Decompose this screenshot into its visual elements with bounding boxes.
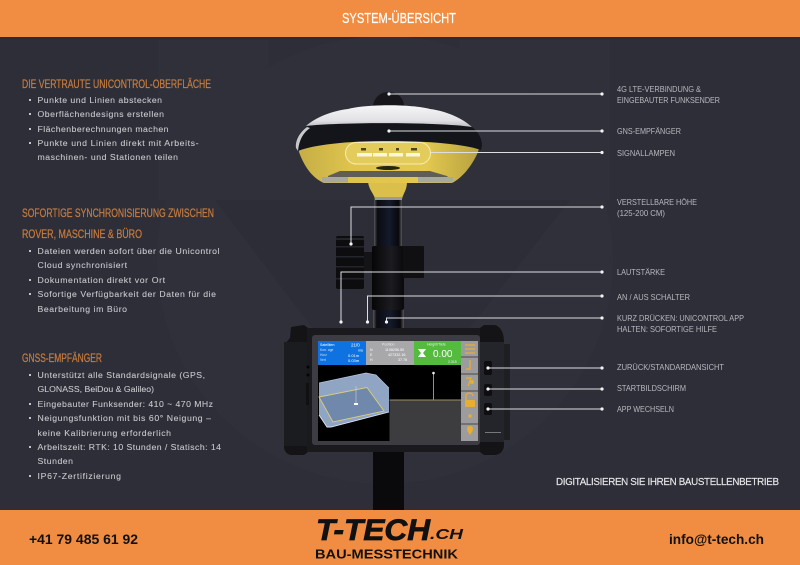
callout labels: ZURÜCK/STANDARDANSICHT [617,362,724,372]
screen panel: blue status: Korr. age [320,348,334,352]
callout labels: 4G LTE-VERBINDUNG & [617,84,701,94]
bullet list: GNSS receiver: IP67-Zertifizierung [38,471,121,481]
screen panel: blue status: 0.01m [348,353,360,358]
screen panel: blue status: Horz [320,353,327,357]
bullet list: interface [29,95,199,162]
tagline: DIGITALISIEREN SIE IHREN BAUSTELLENBETRIEB [556,477,779,488]
screen panel: height: Height/Tiefe [427,342,446,346]
logo: T-TECH.ch: BAU-MESSTECHNIK [315,548,458,562]
bullet list: GNSS receiver: GLONASS, BeiDou & Galileo) [38,384,154,394]
bumper [504,344,510,440]
heading: synchronisation: SOFORTIGE SYNCHRONISIERUNG ZWISCHEN [22,206,214,220]
bullet list: synchronisation: Bearbeitung im Büro [38,304,127,314]
bullet list: synchronisation: Dokumentation direkt vor Ort [38,275,166,285]
screen panel: blue status: 21/0 [351,342,360,348]
neck [368,182,407,199]
bullet list: interface: Punkte und Linien direkt mit Arbeits- [38,138,199,148]
callout labels: STARTBILDSCHIRM [617,383,686,393]
callout labels: SIGNALLAMPEN [617,148,675,158]
logo: T-TECH.ch: .CH [430,526,464,543]
callout labels: KURZ DRÜCKEN: UNICONTROL APP [617,313,744,323]
logo: T-TECH.ch [315,514,464,562]
heading: synchronisation: ROVER, MASCHINE & BÜRO [22,227,142,241]
pole and lower mast [373,198,404,510]
screen: side view [390,372,461,441]
white dome [306,105,472,127]
screen panel: blue status [318,341,366,365]
screen: 3D site view [319,373,389,427]
bullet list: synchronisation: Dateien werden sofort über die Unicontrol [38,246,220,256]
heading: interface: DIE VERTRAUTE UNICONTROL-OBERFLÄCHE [22,77,211,91]
callout labels: EINGEBAUTER FUNKSENDER [617,95,720,105]
bullet list: interface: maschinen- und Stationen teilen [38,152,178,162]
screen panel: blue status: Satelliten [320,343,334,347]
screen panel: height: 2.315 [448,360,457,364]
screen panel: blue status: n/a [358,348,363,352]
screen panel: position: Position [382,342,395,346]
underside [328,171,448,177]
bullet list: synchronisation: Sofortige Verfügbarkeit der Daten für die [38,289,216,299]
leader lines [339,92,604,411]
icon: rugged tablet [284,325,510,455]
screen panel: position [366,341,414,365]
bullet list: synchronisation: Cloud synchronisiert [38,260,128,270]
icon: GNSS rover receiver [296,92,482,200]
callout labels: APP WECHSELN [617,404,674,414]
yellow body [297,140,481,183]
title: SYSTEM-ÜBERSICHT [342,9,456,27]
callout labels [617,84,744,414]
screen panel: position: E [370,353,373,357]
bullet list: GNSS receiver: Unterstützt alle Standardsignale (GPS, [38,370,205,380]
heading: synchronisation [22,206,214,241]
bullet list: interface: Flächenberechnungen machen [38,124,169,134]
bullet list: GNSS receiver: Eingebauter Funksender: 410 ~ 470 MHz [38,399,213,409]
bullet list: GNSS receiver: keine Kalibrierung erforderlich [38,428,171,438]
screen panel: height [414,341,461,365]
bullet list: interface: Punkte und Linien abstecken [38,95,162,105]
tablet side buttons [484,361,501,433]
header bar [0,0,800,37]
screen panel: position: H [370,358,373,362]
panel: unicontrol interface [22,77,211,162]
bullet list: interface: Oberflächendesigns erstellen [38,109,164,119]
bullet list: synchronisation [29,246,220,314]
callout labels: LAUTSTÄRKE [617,267,665,277]
bullet list: GNSS receiver [29,370,221,481]
logo: T-TECH.ch: T-TECH [316,514,431,547]
heading: GNSS receiver: GNSS-EMPFÄNGER [22,351,102,365]
screen side menu [461,341,478,441]
footer bar [0,510,800,565]
screen panel: position: 1108256.50 [385,348,404,352]
screen [318,341,478,441]
antenna cap [373,92,404,106]
screen panel: blue status: Vert [320,358,326,362]
screen panel: blue status: 0.03m [348,358,360,363]
callout labels: VERSTELLBARE HÖHE [617,197,697,207]
callout labels: GNS-EMPFÄNGER [617,126,681,136]
bullet list: GNSS receiver: Neigungsfunktion mit bis 60° Neigung – [38,413,211,423]
screen panel: position: N [370,348,373,352]
callout labels: AN / AUS SCHALTER [617,292,690,302]
callout labels: (125-200 CM) [617,208,665,218]
bullet list: GNSS receiver: Arbeitszeit: RTK: 10 Stunden / Statisch: 14 [38,442,221,452]
panel: synchronisation [22,206,220,314]
screen panel: height: 0.00 [433,349,453,360]
phone number: +41 79 485 61 92 [29,531,138,547]
email address: info@t-tech.ch [669,531,764,547]
screen panel: position: 427332.16 [388,353,405,357]
bullet list: GNSS receiver: Stunden [38,456,73,466]
signal lamp panel [346,142,430,164]
panel: GNSS receiver [22,351,221,481]
screen panel: position: 37.76 [398,358,407,362]
black band [296,119,482,151]
icon: clamp with knob [336,236,424,310]
callout labels: HALTEN: SOFORTIGE HILFE [617,324,717,334]
